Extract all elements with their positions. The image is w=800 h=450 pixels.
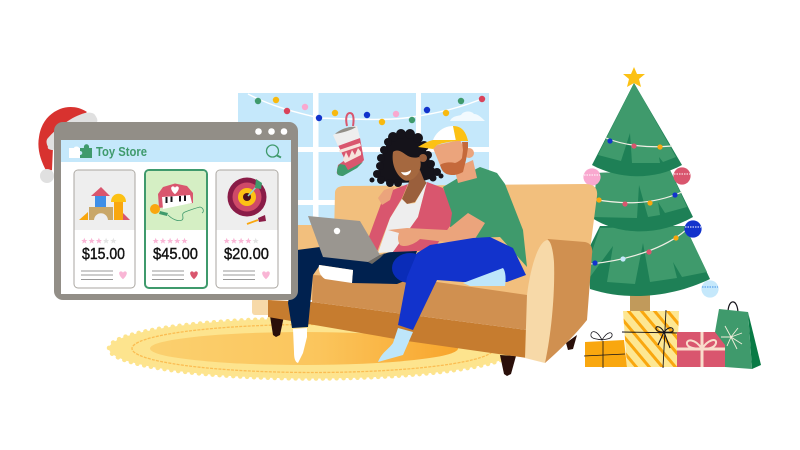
- yellow striped gift: [622, 310, 679, 368]
- woman: [288, 129, 453, 363]
- sofa upper front: [312, 275, 527, 330]
- description lines: [152, 271, 184, 280]
- ear: [419, 154, 427, 162]
- hand on shoulder: [378, 187, 394, 205]
- rating stars: [153, 238, 188, 244]
- light blue sock front: [378, 328, 413, 362]
- sofa back legs: [566, 335, 577, 350]
- tree tier 2: [592, 170, 693, 231]
- store name: Toy Store: [96, 145, 147, 159]
- sofa lower front: [268, 300, 527, 358]
- cardigan: [367, 182, 453, 252]
- sofa right arm front: [525, 240, 554, 363]
- price: $15.00: [82, 246, 125, 263]
- ear: [464, 148, 474, 158]
- window control dots: [255, 128, 287, 135]
- product card: blocks: [74, 170, 135, 288]
- rug: [109, 318, 517, 378]
- search icon: [266, 145, 281, 158]
- far knee: [392, 253, 428, 283]
- string lights: [248, 94, 485, 125]
- arm: [388, 213, 485, 246]
- heart: [262, 271, 270, 279]
- product card: keyboard: [145, 170, 207, 288]
- sofa left arm: [252, 225, 340, 300]
- star: [623, 67, 645, 87]
- man: [378, 126, 527, 362]
- sofa legs: [270, 316, 284, 337]
- face: [393, 151, 421, 181]
- description lines: [223, 271, 255, 280]
- tree tier 3: [588, 226, 710, 296]
- stocking: [333, 113, 364, 176]
- baubles: [583, 167, 719, 298]
- santa hat: [38, 107, 97, 183]
- price: $45.00: [153, 246, 198, 263]
- heart: [119, 271, 127, 279]
- price: $20.00: [224, 246, 269, 263]
- cloud: [450, 112, 485, 121]
- toy blocks icon: [79, 187, 130, 220]
- orange gift: [584, 332, 627, 368]
- beard: [440, 142, 468, 175]
- product card: darts: [216, 170, 278, 288]
- garlands: [590, 138, 686, 264]
- christmas tree: [583, 67, 719, 313]
- store header bar: [61, 140, 291, 162]
- sofa right arm side: [530, 239, 592, 363]
- pants: [288, 247, 417, 328]
- hair: [370, 129, 444, 187]
- puzzle logo: [69, 144, 92, 158]
- white sock on lower foot: [293, 328, 307, 363]
- description lines: [81, 271, 113, 280]
- gifts: [584, 302, 761, 369]
- red gift: [677, 332, 725, 367]
- heart: [190, 271, 198, 279]
- rating stars: [224, 238, 259, 244]
- light blue sock back: [463, 268, 506, 286]
- white sock on raised foot: [319, 265, 353, 283]
- cap: [418, 126, 468, 149]
- face: [433, 140, 465, 172]
- laptop: [308, 216, 385, 264]
- browser window: Toy Store: [54, 122, 298, 300]
- jeans: [398, 237, 526, 330]
- sofa back: [333, 184, 597, 300]
- shirt: [443, 167, 527, 267]
- trunk: [630, 295, 650, 313]
- rating stars: [81, 238, 116, 244]
- window: [238, 93, 489, 235]
- shopping bag: [715, 302, 761, 369]
- dartboard icon: [228, 178, 266, 224]
- sofa: [252, 184, 597, 376]
- toy keyboard icon: [150, 184, 203, 221]
- smile: [401, 170, 411, 175]
- neck and chest: [402, 170, 427, 204]
- tank top: [378, 182, 427, 253]
- neck: [456, 160, 477, 183]
- tree tier 1: [592, 83, 682, 176]
